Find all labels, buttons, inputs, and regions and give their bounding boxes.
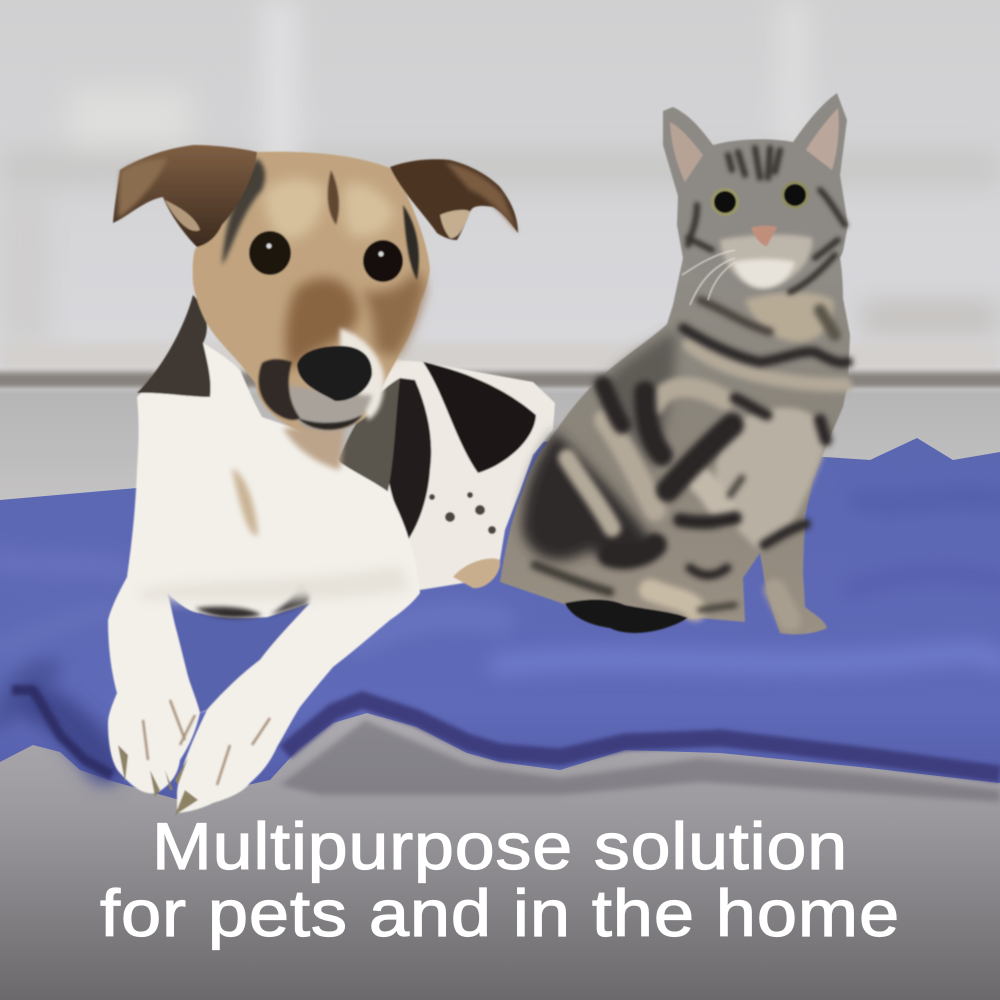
forehead dark streaks bbox=[222, 158, 265, 265]
dog eyes bbox=[249, 231, 291, 275]
dog chest cream mark bbox=[232, 468, 258, 536]
dog shadow below chest bbox=[195, 585, 309, 618]
dog gap between legs bbox=[167, 593, 310, 713]
dog left dark shoulder patch bbox=[137, 295, 211, 397]
cat body bbox=[500, 258, 850, 634]
cat flank dark mass bbox=[522, 432, 655, 563]
dog toes bbox=[143, 700, 270, 785]
dog bbox=[108, 145, 555, 815]
dog claws bbox=[118, 745, 198, 815]
dog neck band bbox=[387, 378, 431, 540]
cat head stripes bbox=[688, 148, 845, 292]
face right cheek brown bbox=[362, 270, 425, 358]
dog nose bbox=[297, 346, 372, 401]
cat eyes bbox=[711, 188, 739, 216]
dog rear spots bbox=[429, 492, 496, 534]
dog chest and forelegs bbox=[108, 343, 420, 813]
dog chest shading bbox=[140, 565, 410, 601]
dog head bbox=[193, 152, 430, 433]
cat shoulder mottling bbox=[600, 330, 676, 470]
cat flank pale stripes bbox=[567, 345, 845, 620]
dog brown under chin bbox=[283, 425, 345, 470]
dog left ear bbox=[113, 145, 257, 247]
cat bbox=[500, 93, 850, 634]
cat tail bbox=[565, 599, 688, 633]
caption: for pets and in the home bbox=[100, 876, 900, 950]
dog rear body bbox=[340, 360, 555, 590]
mouth bbox=[298, 415, 362, 430]
cat muzzle bbox=[720, 235, 812, 288]
whiskers bbox=[682, 250, 735, 305]
muzzle white stripe bbox=[340, 328, 384, 420]
muzzle dark left bbox=[258, 359, 300, 420]
forehead pale patch bbox=[264, 179, 325, 240]
bottom shadow under blanket bbox=[280, 720, 1000, 802]
cat neck cream bbox=[745, 292, 833, 342]
cat ears inner bbox=[670, 122, 703, 182]
dog hind paw bbox=[453, 558, 500, 588]
caption bbox=[100, 809, 900, 950]
dog black back patch bbox=[423, 362, 536, 473]
caption: Multipurpose solution bbox=[152, 809, 848, 883]
frayed blanket edge bbox=[285, 700, 1000, 774]
blanket shading folds bbox=[0, 497, 1000, 765]
face brown bridge bbox=[285, 278, 358, 372]
left fringe bbox=[12, 690, 112, 775]
dog neck gray patch bbox=[338, 378, 400, 495]
cat head bbox=[663, 93, 848, 292]
cat chest pale bbox=[715, 408, 828, 552]
blue blanket bbox=[0, 438, 1000, 800]
muzzle gray bbox=[289, 385, 372, 431]
dog right ear bbox=[390, 159, 518, 240]
cat dark stripes bbox=[535, 300, 848, 610]
cat nose bbox=[751, 226, 777, 246]
